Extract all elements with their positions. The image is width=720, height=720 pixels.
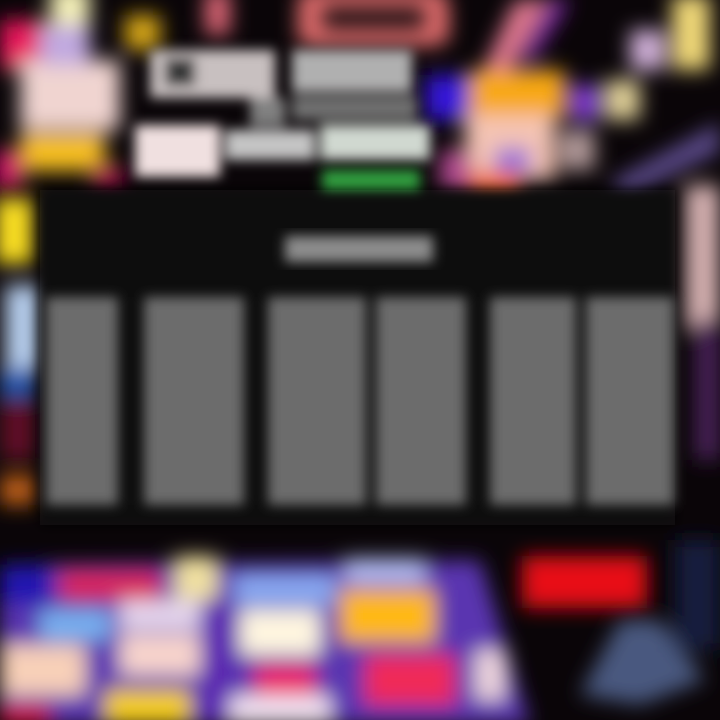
top decorative collage [0, 0, 720, 460]
bottom decorative tiles [0, 556, 530, 720]
data table panel [40, 190, 675, 525]
blue bottom-right shape [580, 540, 720, 705]
table heading [285, 236, 433, 262]
table columns [46, 297, 674, 505]
left edge colour strip [0, 198, 40, 505]
green button [322, 170, 420, 204]
red bottom-right block [522, 556, 647, 608]
title block [135, 50, 430, 177]
